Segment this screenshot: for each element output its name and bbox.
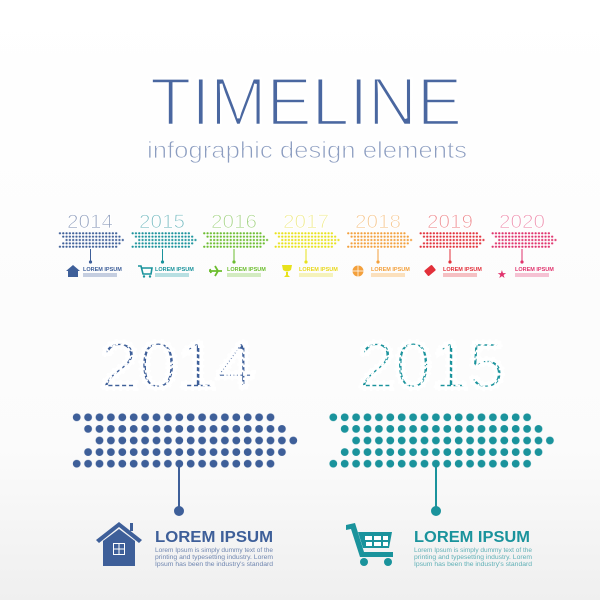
connector 2015 (431, 464, 441, 516)
heading + text 2015: LOREM IPSUM (414, 529, 530, 546)
dot arrow 2014 (71, 412, 299, 470)
icon: cart (346, 523, 393, 566)
small item: 2020: 2020 (499, 212, 545, 233)
small item: 2019 (419, 212, 485, 277)
small item: 2014 (58, 212, 124, 277)
small item: 2016: 2016 (211, 212, 257, 233)
small item: 2014: 2014 (67, 212, 113, 233)
dot arrow 2015 (328, 412, 556, 470)
big item: 2015 (328, 328, 556, 568)
dashed year 2014: 2014 (100, 328, 255, 402)
title: TIMELINE (150, 64, 462, 140)
small item: 2018: LOREM IPSUM (371, 267, 410, 273)
small item: 2018 (347, 212, 413, 277)
heading + text 2014: printing and typesetting industry. Lorem (155, 554, 273, 561)
heading + text 2015: printing and typesetting industry. Lorem (414, 554, 532, 561)
dashed year 2014: 2014 (100, 328, 255, 402)
small item: 2016 (203, 212, 269, 277)
small item: 2019: 2019 (427, 212, 473, 233)
heading + text 2014: Lorem Ipsum is simply dummy text of the (155, 547, 274, 554)
small timeline row (58, 212, 557, 281)
small item: 2020: LOREM IPSUM (515, 267, 554, 273)
small item: 2018: 2018 (355, 212, 401, 233)
small item: 2015: LOREM IPSUM (155, 267, 194, 273)
small item: 2014: LOREM IPSUM (83, 267, 122, 273)
heading + text 2015: Ipsum has been the industry's standard (414, 561, 533, 568)
small item: 2017: 2017 (283, 212, 329, 233)
heading + text 2015: Lorem Ipsum is simply dummy text of the (414, 547, 533, 554)
small item: 2017 (274, 212, 340, 277)
heading + text 2015 (414, 529, 533, 568)
icon: house (96, 522, 142, 566)
small item: 2020: ★ (497, 269, 507, 281)
big item: 2014 (71, 328, 299, 568)
small item: 2017: LOREM IPSUM (299, 267, 338, 273)
subtitle: infographic design elements (147, 137, 467, 163)
dashed year 2015: 2015 (358, 328, 505, 402)
dashed year 2015: 2015 (358, 328, 505, 402)
small item: 2015 (131, 212, 197, 278)
small item: 2015: 2015 (139, 212, 185, 233)
small item: 2020 (491, 212, 557, 281)
small item: 2016: LOREM IPSUM (227, 267, 266, 273)
heading + text 2014 (155, 529, 274, 568)
heading + text 2014: LOREM IPSUM (155, 529, 273, 546)
small item: 2019: LOREM IPSUM (443, 267, 482, 273)
heading + text 2014: Ipsum has been the industry's standard (155, 561, 274, 568)
connector 2014 (174, 464, 184, 516)
